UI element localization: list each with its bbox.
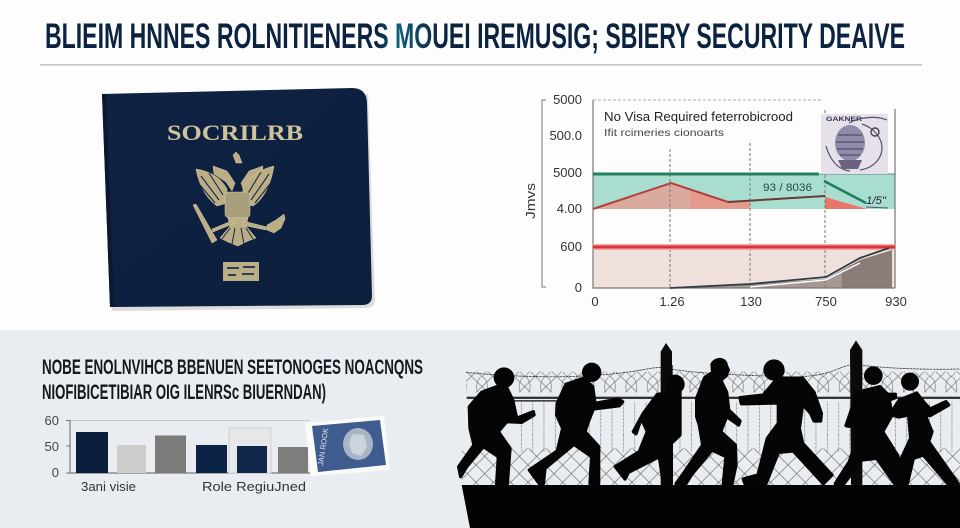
- icon: stamp: GAKNER: [826, 117, 863, 123]
- series lines: [593, 183, 728, 209]
- chart annotation: No Visa Required feterrobicrood: [604, 109, 793, 124]
- bar chart x labels: 3ani visie: [81, 479, 136, 494]
- x axis labels: 750: [815, 294, 837, 309]
- x axis labels: 130: [740, 294, 762, 309]
- passport bottom mark: [223, 262, 259, 281]
- figure 4: [676, 359, 740, 484]
- figure 5: [740, 361, 832, 484]
- data label small: 1/5": [866, 195, 887, 207]
- chart annotation subline: Ifit rcimeries cionoarts: [604, 127, 724, 139]
- figure 1: [459, 369, 534, 484]
- passport cover label: SOCRILRB: [167, 120, 303, 145]
- bar chart: [45, 413, 310, 494]
- grey growth area: [670, 250, 892, 288]
- panel: bottom band: [0, 330, 960, 528]
- green threshold: [593, 172, 819, 176]
- y axis labels: 4.00: [557, 201, 582, 216]
- y axis labels: [549, 92, 582, 295]
- panel heading: NOBE ENOLNVIHCB BBENUEN SEETONOGES NOACNQNS: [42, 356, 423, 379]
- red threshold: [593, 244, 895, 250]
- y axis labels: 5000: [553, 92, 582, 107]
- icon: stamp: [821, 114, 888, 174]
- y axis labels: 5000: [553, 165, 582, 180]
- red series fills: [593, 183, 750, 209]
- ground: [462, 485, 960, 528]
- fence post right: [850, 340, 862, 485]
- panel heading: [42, 356, 423, 404]
- x axis labels: 0: [591, 294, 599, 309]
- y axis labels: 500.0: [549, 128, 582, 143]
- icon: gold emblem: [193, 152, 285, 246]
- bars: [76, 432, 108, 473]
- panel heading: NIOFIBICETIBIAR OIG ILENRSc BIUERNDAN): [42, 381, 326, 404]
- figure 6: [835, 368, 905, 484]
- y axis labels: 0: [575, 280, 582, 295]
- x axis labels: 930: [885, 294, 907, 309]
- illustration: border fence and people: [459, 340, 960, 528]
- icon: passport stamp: [305, 416, 390, 476]
- figure 7: [890, 374, 958, 484]
- data label: 93 / 8036: [763, 182, 812, 194]
- y axis title: Jmvs: [523, 182, 538, 219]
- x axis labels: 1.26: [659, 294, 685, 309]
- pink band: [593, 247, 895, 288]
- bar chart y labels: 0: [52, 465, 59, 480]
- icon: passport: [102, 88, 375, 311]
- icon: passport stamp: JAN ROOK: [316, 427, 330, 466]
- figure 3: [615, 376, 683, 484]
- fence post left: [661, 343, 673, 485]
- line chart: [523, 92, 907, 309]
- bar chart y labels: 50: [45, 439, 59, 454]
- axes: [593, 100, 895, 288]
- bar chart y labels: [45, 413, 59, 480]
- bar chart y labels: 60: [45, 413, 59, 428]
- teal band: [593, 174, 895, 209]
- fence: [462, 364, 960, 485]
- figure 2: [529, 364, 623, 484]
- bar chart: Role RegiuJned: [202, 479, 306, 494]
- x axis labels: [591, 294, 907, 309]
- y axis labels: 600: [560, 239, 582, 254]
